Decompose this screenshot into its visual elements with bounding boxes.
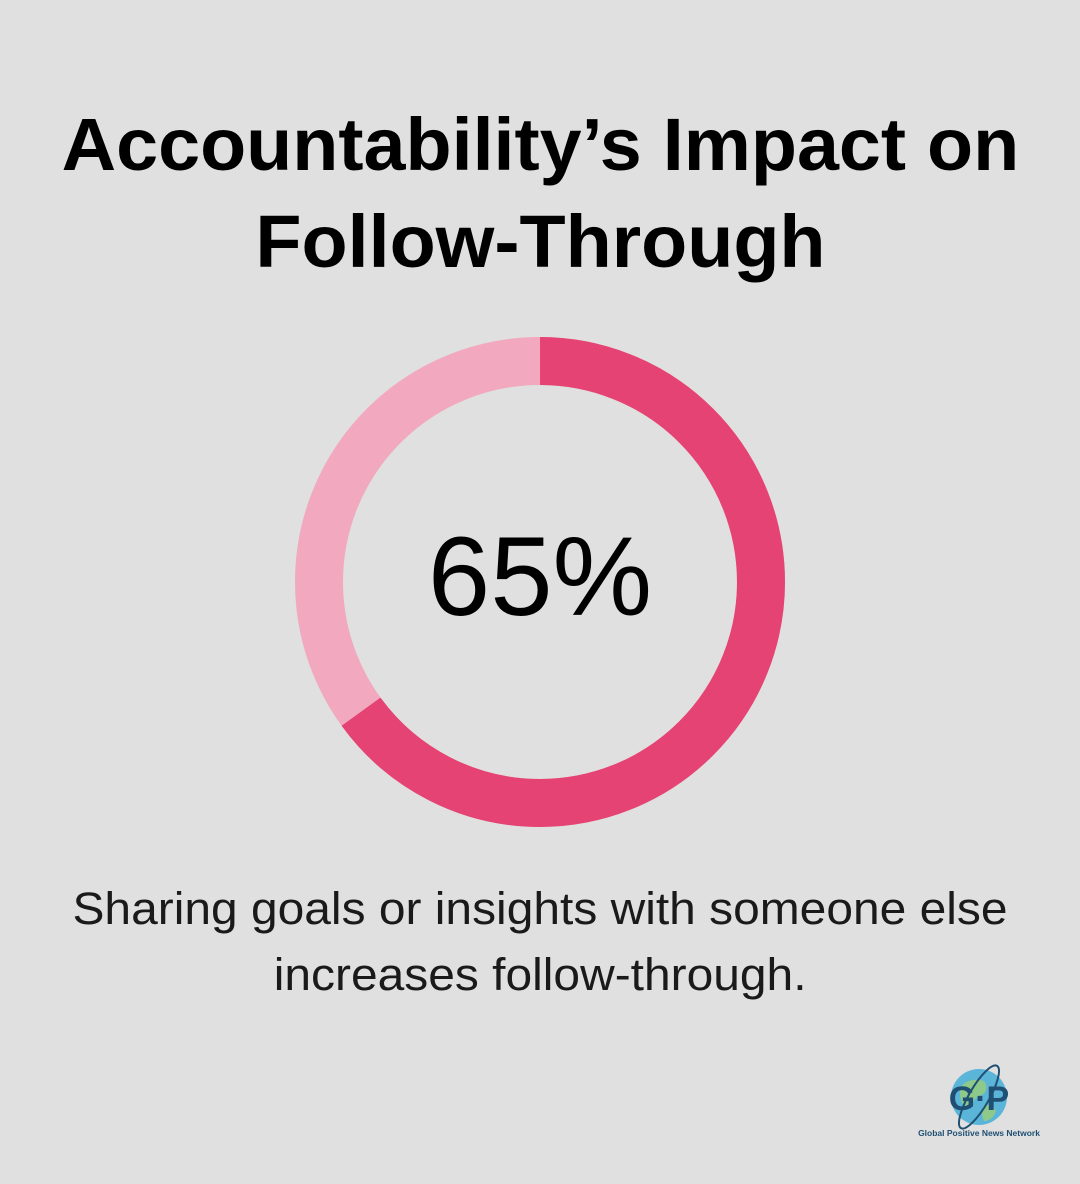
description text [72,883,1008,1000]
title [61,103,1019,283]
logo [918,1064,1040,1138]
logo text: Global Positive News Network [918,1128,1040,1138]
donut value arc 65% [319,361,761,803]
title: Follow-Through [255,200,825,283]
donut background ring [319,361,761,803]
icon: globe: G·P [949,1080,1009,1118]
description text: increases follow-through. [274,949,806,1000]
title: Accountability’s Impact on [61,103,1019,186]
percentage label: 65% [428,514,652,639]
description text: Sharing goals or insights with someone else [72,883,1008,934]
